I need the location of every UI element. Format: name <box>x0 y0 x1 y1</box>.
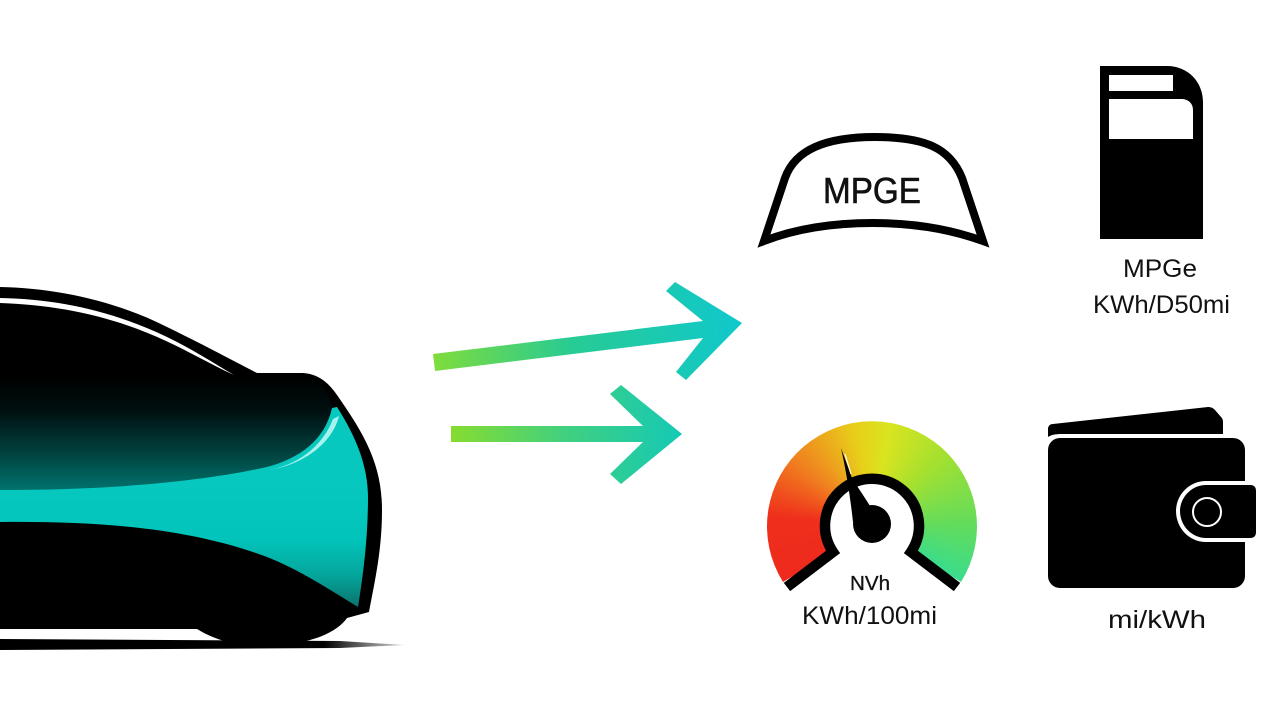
wallet flap <box>1048 407 1223 437</box>
needle glint <box>845 454 851 474</box>
teal body panel <box>0 407 368 607</box>
ground shadow <box>0 639 405 650</box>
label: KWh/100mi: KWh/100mi <box>802 602 937 630</box>
badge outline <box>764 137 983 241</box>
clasp outline <box>1176 481 1246 542</box>
label: MPGe: MPGe <box>1123 255 1197 283</box>
badge label: MPGE <box>823 170 921 211</box>
gauge inner dial <box>787 479 957 587</box>
gauge needle <box>841 448 870 522</box>
roof highlight <box>0 298 234 375</box>
clasp button <box>1193 498 1221 526</box>
gauge band <box>787 479 957 587</box>
fuel pump shape <box>1100 66 1203 239</box>
clasp tab <box>1180 485 1256 538</box>
car body <box>0 287 382 646</box>
label: mi/kWh: mi/kWh <box>1108 606 1206 634</box>
gauge hub <box>853 505 891 543</box>
dark gradient hood <box>0 372 332 490</box>
arrow: upper <box>433 282 742 380</box>
windshield glint <box>268 416 339 470</box>
label: KWh/D50mi: KWh/D50mi <box>1093 291 1230 319</box>
wallet body <box>1048 438 1245 588</box>
infographic canvas <box>0 66 1256 650</box>
gauge colour arc <box>767 421 977 582</box>
wallet icon with label <box>1048 407 1256 634</box>
MPGE badge <box>764 137 983 241</box>
label: NVh: NVh <box>850 573 890 595</box>
arrow: lower <box>451 385 682 484</box>
fuel pump icon with labels <box>1093 66 1230 319</box>
gauge icon with labels <box>767 421 977 624</box>
car illustration <box>0 287 405 650</box>
